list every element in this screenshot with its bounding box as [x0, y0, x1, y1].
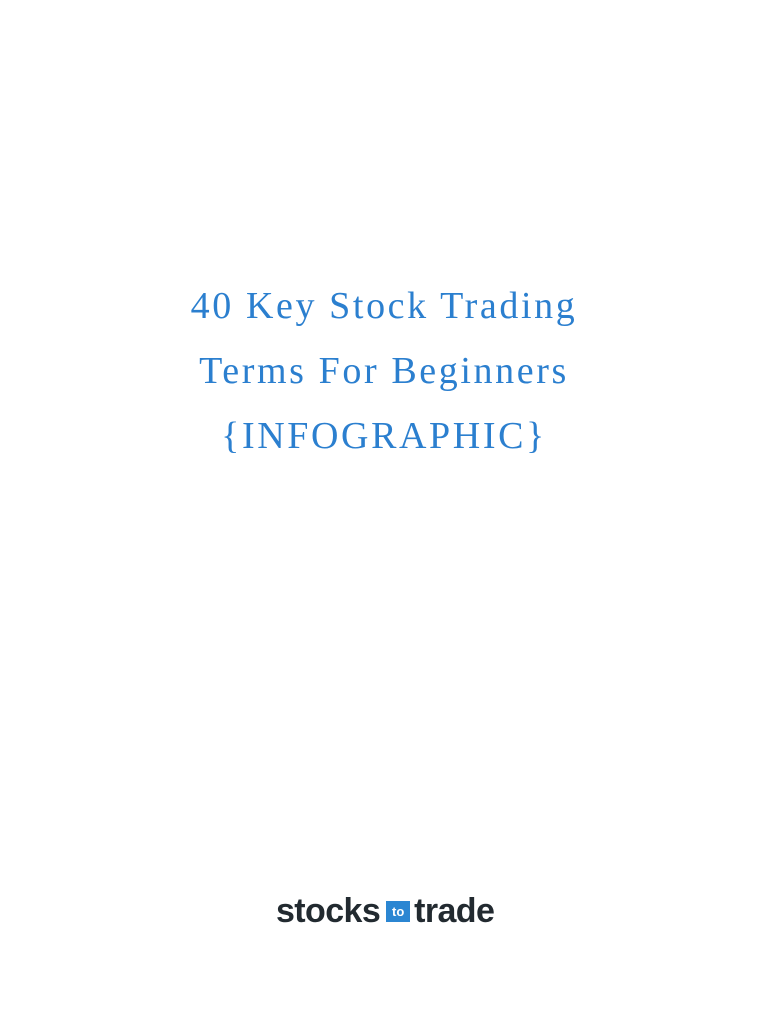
title: Terms For Beginners — [199, 350, 569, 392]
title: {INFOGRAPHIC} — [221, 415, 547, 457]
title: 40 Key Stock Trading — [191, 285, 577, 327]
title — [191, 285, 577, 457]
logo: stockstotrade: to — [392, 904, 404, 919]
logo: stockstotrade: stocks trade — [276, 892, 494, 930]
